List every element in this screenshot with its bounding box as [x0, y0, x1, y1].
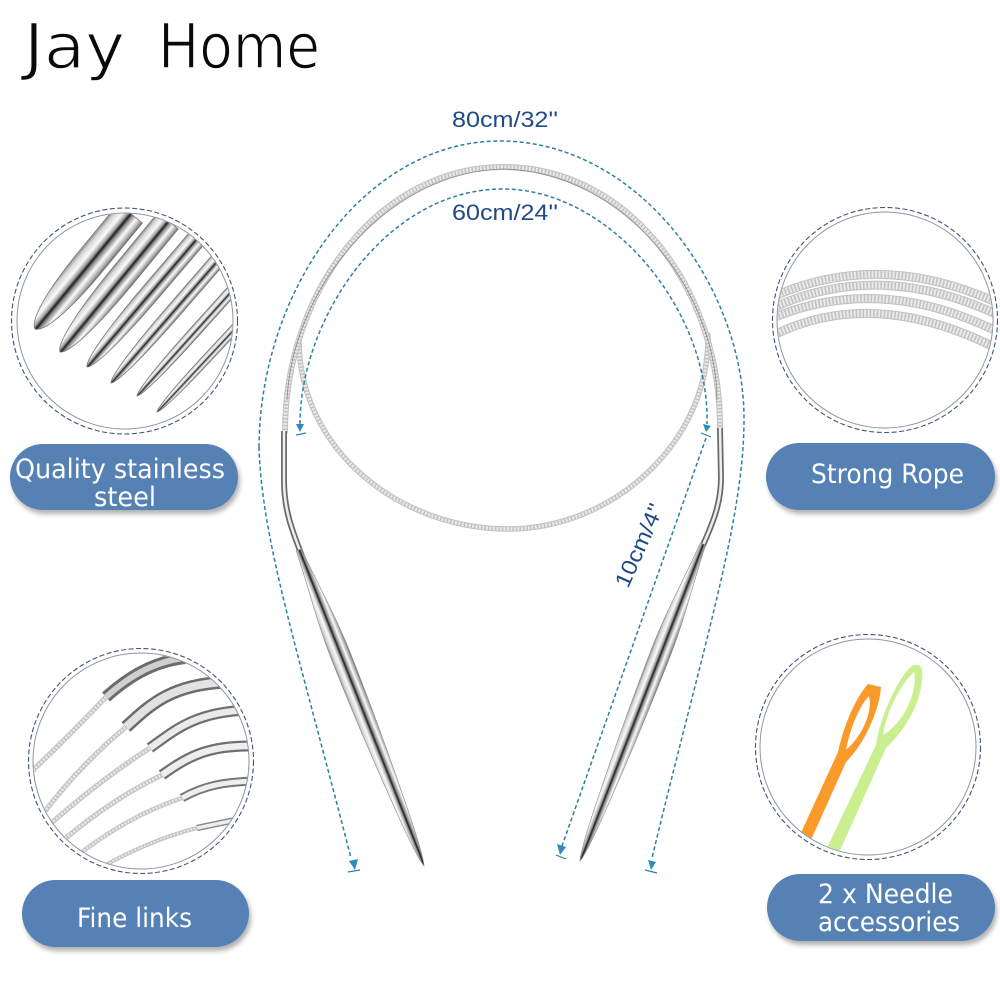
label pill — [22, 880, 249, 947]
panel: needle accessories — [756, 634, 995, 941]
label pill: steel — [94, 482, 156, 513]
label pill — [10, 444, 238, 513]
left needle neck — [284, 431, 302, 556]
title: Jay Home — [20, 10, 320, 83]
circular needle product diagram — [284, 167, 721, 870]
label pill: 2 x Needle — [818, 879, 953, 910]
title: Jay Home: Jay — [20, 10, 125, 83]
right needle body — [571, 540, 712, 865]
panel: quality stainless steel — [10, 203, 249, 513]
label pill: Strong Rope — [811, 459, 964, 490]
wire: outer arch — [285, 167, 720, 432]
dimension: 60cm inner dashed arc — [296, 189, 711, 437]
title: Jay Home: Home — [158, 10, 320, 83]
label pill: Fine links — [77, 903, 192, 934]
circle frame — [772, 208, 998, 432]
label: 80cm/32: 80cm/32'' — [452, 107, 558, 132]
rope photo — [770, 274, 1000, 350]
label pill — [767, 874, 995, 941]
orange needle — [800, 684, 881, 840]
label pill — [766, 443, 995, 510]
label: 60cm/24: 60cm/24'' — [452, 200, 558, 225]
circle frame — [12, 208, 238, 434]
circle frame — [756, 634, 980, 860]
dimension: 80cm outer dashed arc — [259, 141, 744, 873]
dimension: 10cm dashed line — [556, 438, 706, 859]
circle frame — [28, 648, 254, 874]
green needle — [826, 665, 923, 855]
right needle neck — [700, 428, 721, 552]
wire loop: inner — [299, 335, 708, 529]
needle tips photo — [34, 214, 232, 412]
panel: fine links — [22, 648, 255, 947]
panel: strong rope — [766, 208, 1000, 510]
label pill: accessories — [818, 907, 960, 938]
label pill: Quality stainless — [15, 454, 225, 485]
label: 10cm/4: 10cm/4'' — [610, 500, 669, 591]
plastic needles — [800, 665, 923, 855]
left needle body — [290, 546, 433, 870]
wires and tubes photo — [28, 658, 255, 868]
